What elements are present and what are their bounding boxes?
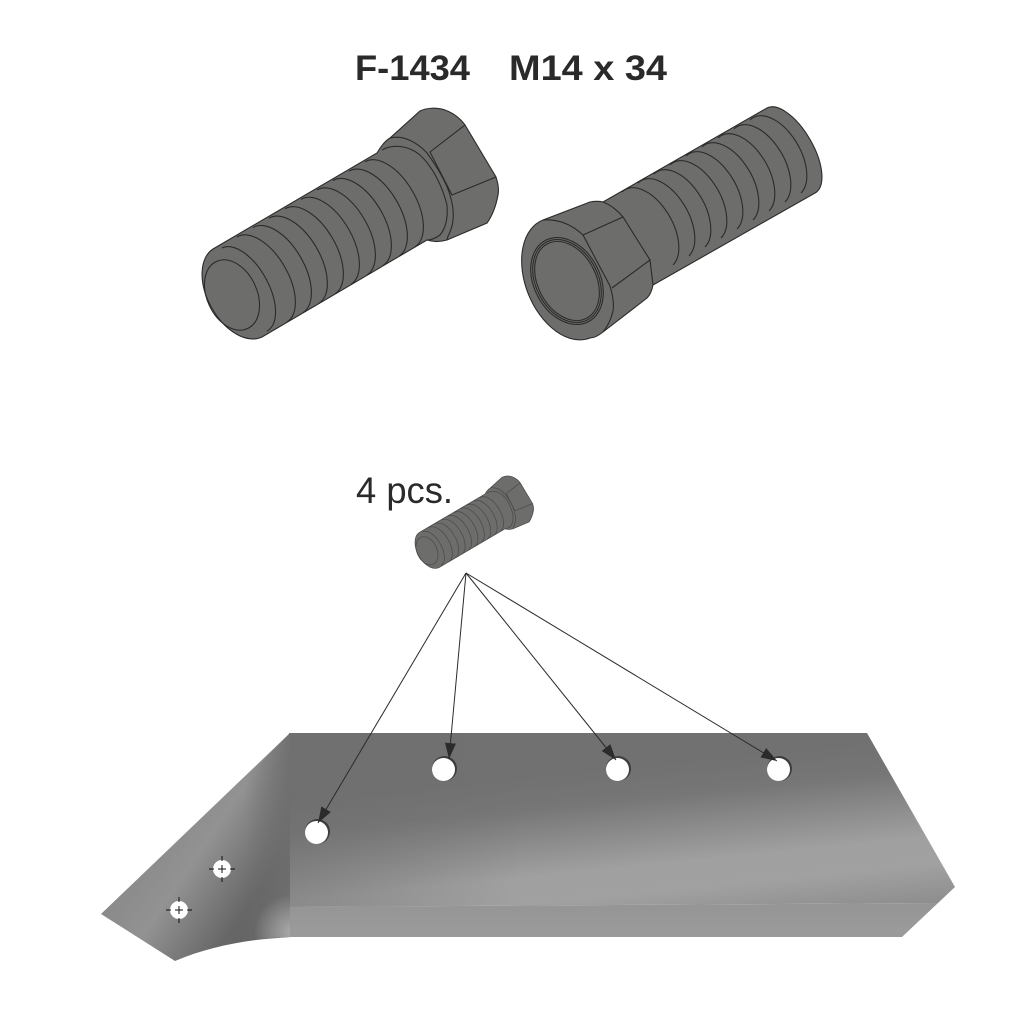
bolt: head-end front view <box>516 107 822 340</box>
arrows to mounting holes <box>318 573 777 823</box>
mounting hole 1 <box>305 819 330 844</box>
tip hole lower with crosshair <box>166 897 192 923</box>
mounting hole 4 <box>767 756 792 781</box>
blade wing seam shading <box>245 733 290 941</box>
title: F-1434 <box>355 48 470 88</box>
blade lower bevel <box>290 903 938 937</box>
icon: small bolt <box>412 476 534 568</box>
title <box>355 48 667 88</box>
mounting hole 3 <box>606 756 631 781</box>
blade wing corner highlight <box>250 890 290 940</box>
blade left wing <box>101 733 290 961</box>
mounting hole 2 <box>432 756 457 781</box>
title: M14 x 34 <box>509 48 667 88</box>
quantity label: 4 pcs. <box>356 470 453 511</box>
blade face shading <box>289 733 520 907</box>
bolt: head-end rear view <box>194 108 498 339</box>
blade main face <box>289 733 955 907</box>
blade <box>101 733 955 961</box>
tip hole upper with crosshair <box>209 856 235 882</box>
